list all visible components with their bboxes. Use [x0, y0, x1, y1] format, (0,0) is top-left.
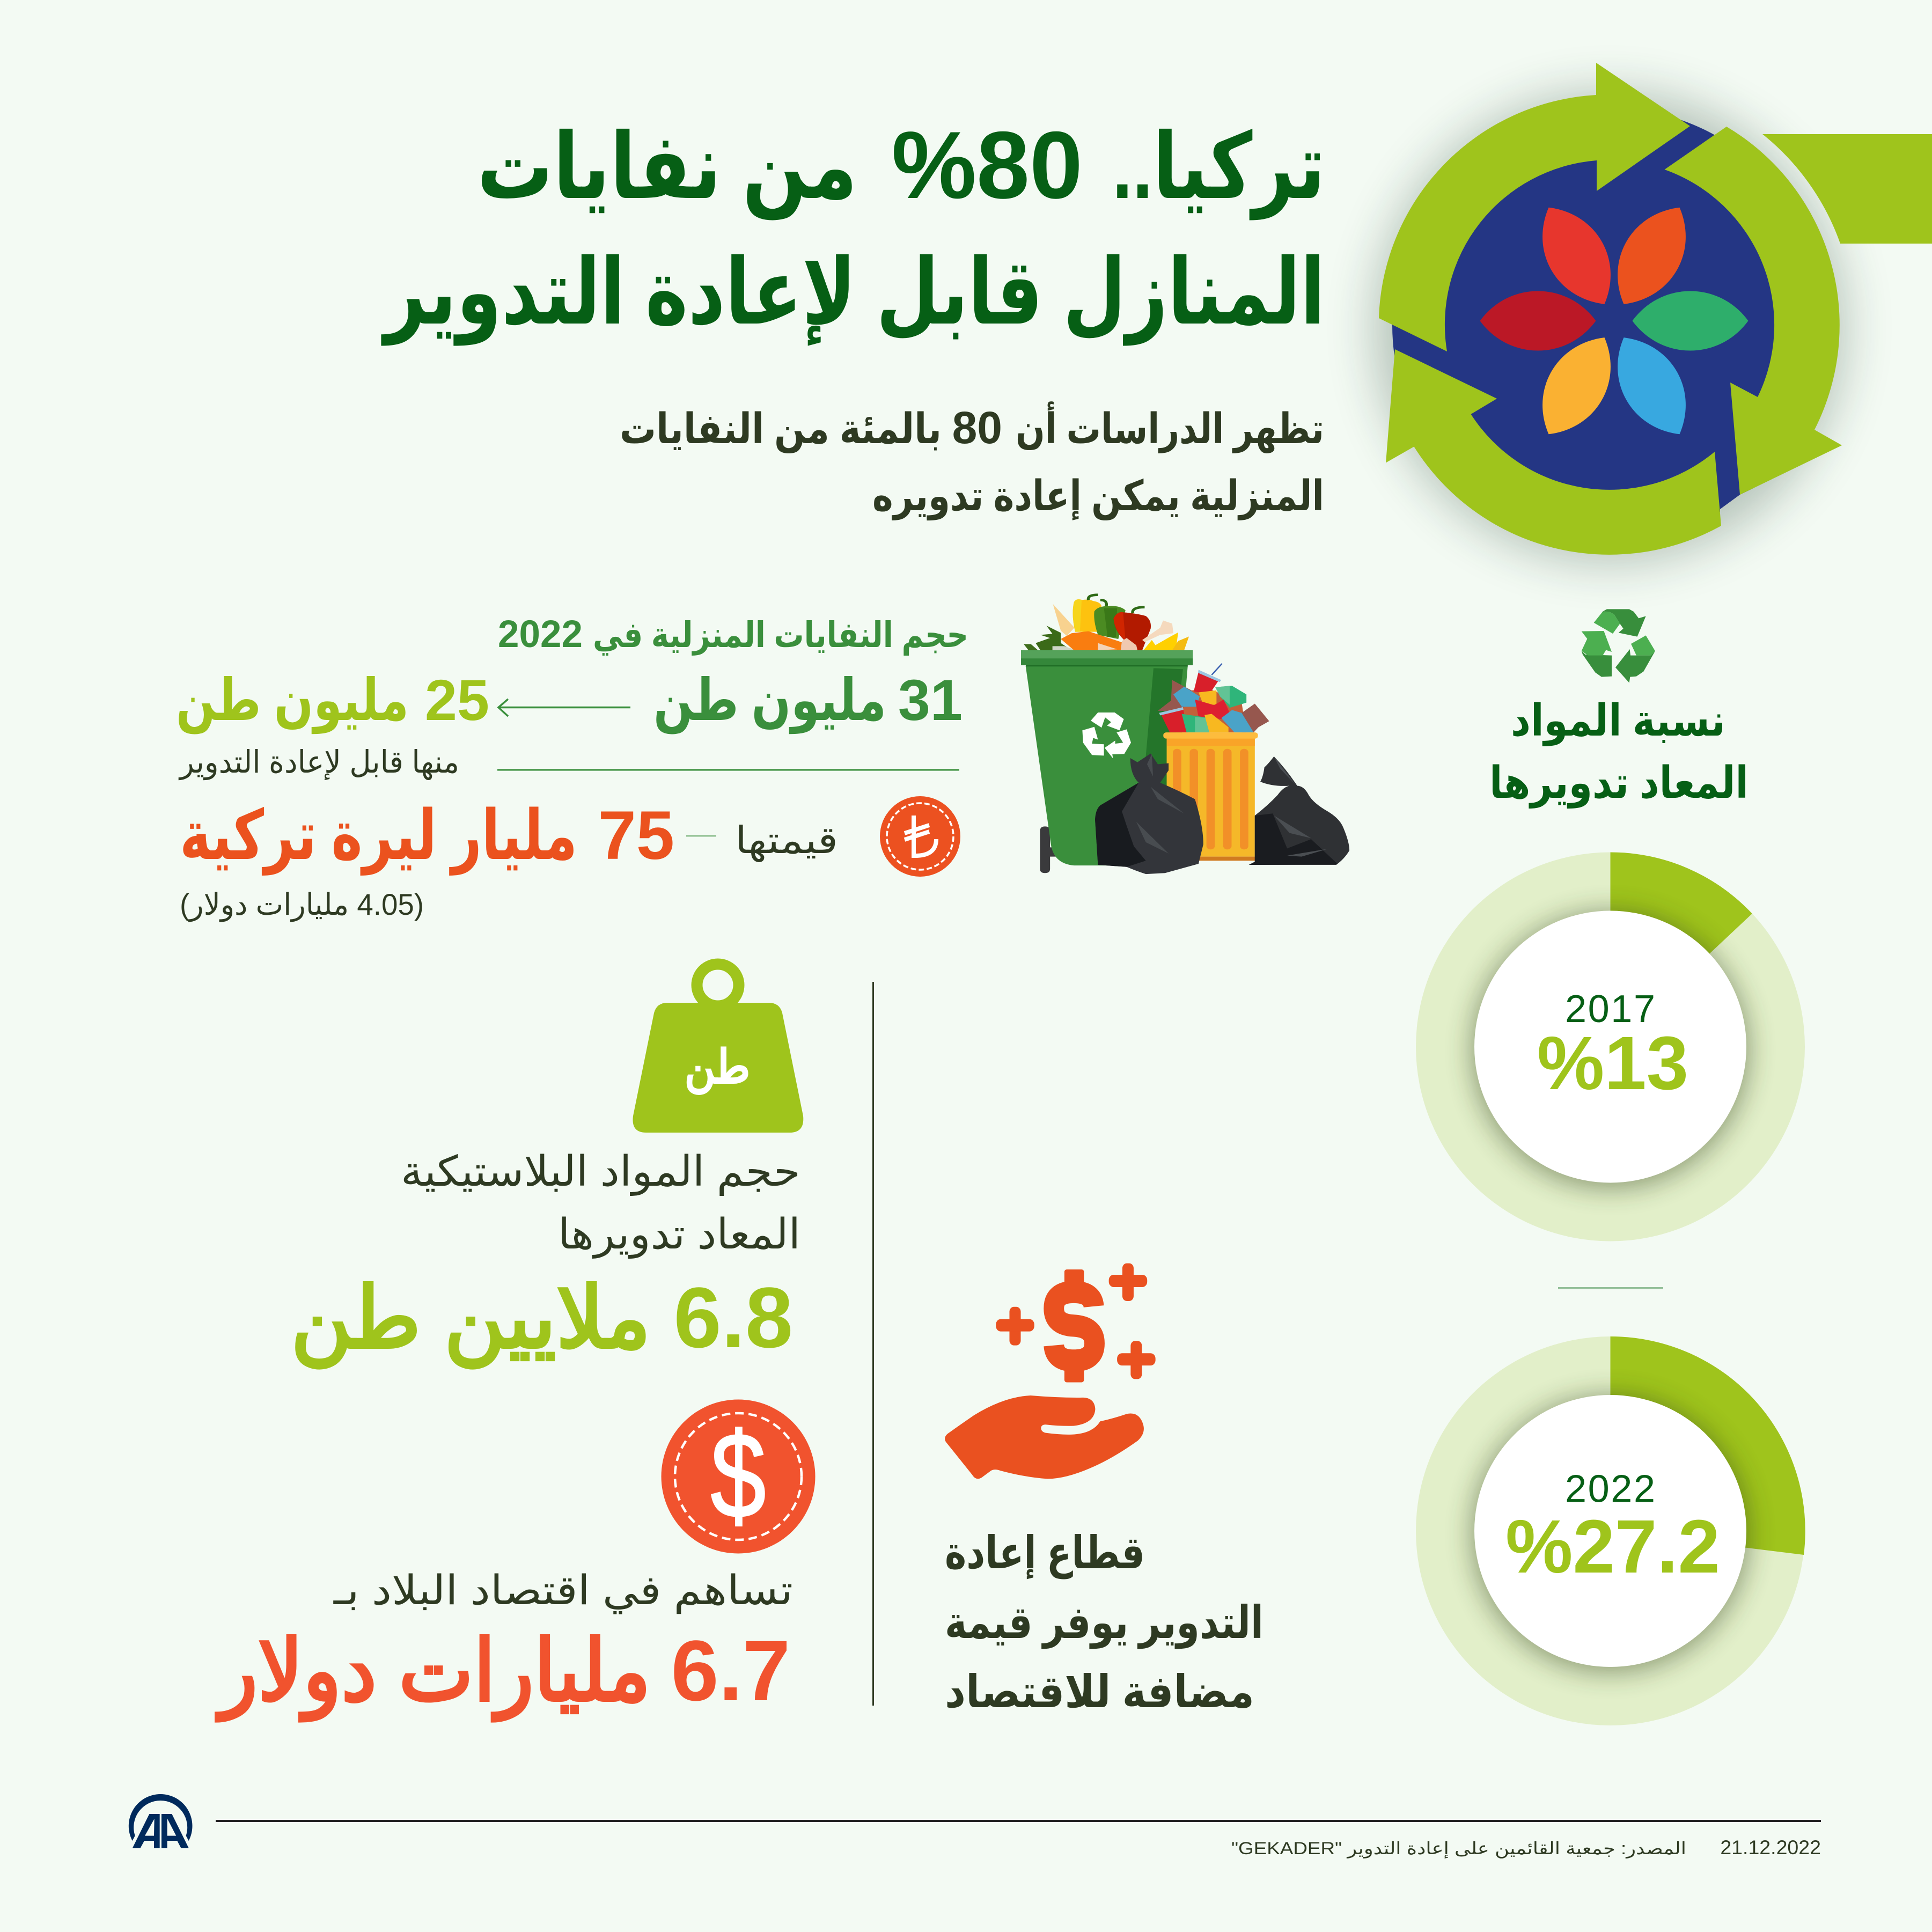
icon: dollar coin: [661, 1399, 816, 1554]
text: recycling sector adds value: التدوير يوفر قيمة: [945, 1597, 1263, 1649]
heading: household waste volume 2022: حجم النفايات المنزلية في: [593, 615, 968, 656]
title: %80: [892, 112, 1083, 218]
label: its value: قيمتها: [735, 819, 838, 862]
text: contributes to economy: تساهم في اقتصاد البلاد بـ: [333, 1568, 793, 1614]
black bag left: [1095, 754, 1203, 874]
title: تركيا..: [1112, 116, 1325, 221]
black bag right: [1249, 756, 1349, 865]
stat: 6.8 million tons: ملايين طن: [291, 1271, 651, 1368]
stat: 31 million tons: مليون طن: [653, 667, 886, 734]
icon: hand with dollar: [945, 1263, 1156, 1479]
title: من نفايات: [477, 116, 857, 221]
stat: 25 million tons: مليون طن: [176, 667, 409, 734]
stat: 6.7 billion dollars: 6.7: [671, 1622, 790, 1718]
text: recycled plastics volume: المعاد تدويرها: [558, 1210, 800, 1259]
text: recycling sector adds value: مضافة للاقتصاد: [945, 1666, 1254, 1717]
subtitle: تظهر الدراسات أن: [1016, 401, 1324, 453]
source: المصدر: جمعية القائمين على إعادة التدوير "GEKADER": [1231, 1839, 1686, 1858]
value 27.2%: %27.2: [1505, 1504, 1720, 1589]
yellow can: [1163, 732, 1258, 861]
icon: trash bins and bags: [1021, 595, 1349, 874]
icon: lira coin: [880, 796, 960, 877]
arrow: 31 to 25 million: [498, 699, 630, 716]
text: recycled plastics volume: حجم المواد البلاستيكية: [401, 1148, 800, 1196]
subtitle: بالمئة من النفايات: [620, 405, 942, 453]
green banner behind logo: [1762, 134, 1932, 244]
stat: 75 billion lira: مليار ليرة تركية: [180, 797, 577, 876]
heading: recycled material rate: نسبة المواد: [1511, 696, 1725, 746]
stat: 31 million tons: 31: [898, 667, 963, 732]
flower petals: [1480, 193, 1748, 449]
navy disc: [1392, 120, 1775, 512]
text: recycled plastics volume: [401, 1148, 800, 1259]
logo: AA: [129, 1794, 192, 1848]
stat: 6.7 billion dollars: مليارات دولار: [216, 1624, 651, 1721]
stat: 75 billion lira: 75: [598, 797, 674, 874]
heading: recycled material rate: [1489, 696, 1749, 809]
green bin: [1021, 650, 1193, 873]
subtitle: المنزلية يمكن إعادة تدويره: [872, 472, 1324, 521]
stat: 25 million tons: 25: [425, 667, 489, 732]
text: recycling sector adds value: [945, 1527, 1263, 1717]
stat: 6.8 million tons: 6.8: [674, 1269, 793, 1365]
donut chart: 2017: [1416, 852, 1805, 1242]
icon: weight: [633, 964, 803, 1133]
icon: recycling logo with flower: [1373, 63, 1932, 563]
label: recyclable portion: منها قابل لإعادة التدوير: [178, 745, 459, 781]
recycling symbol on bin: [1082, 712, 1131, 759]
icon: recycling symbol: [1582, 609, 1655, 683]
heading: recycled material rate: المعاد تدويرها: [1489, 759, 1749, 809]
date: 21.12.2022: [1720, 1836, 1821, 1858]
recycling arrow: bottom: [1386, 349, 1721, 555]
food waste: [1024, 595, 1189, 650]
recycling arrow: top left: [1379, 63, 1690, 351]
heading: household waste volume 2022: [498, 613, 968, 656]
subtitle: [620, 401, 1324, 521]
stat: 6.8 million tons: [291, 1269, 793, 1368]
text: recycling sector adds value: قطاع إعادة: [945, 1527, 1145, 1580]
plastic pile: [1158, 664, 1269, 732]
recycling arrow: right: [1664, 127, 1842, 495]
year 2017: 2017: [1565, 988, 1655, 1031]
value 13%: %13: [1537, 1020, 1688, 1105]
heading: household waste volume 2022: 2022: [498, 613, 583, 656]
title: المنازل قابل لإعادة التدوير: [381, 241, 1325, 346]
icon: dollar coin: $: [710, 1408, 766, 1543]
label: 4.05 billion dollars: (4.05 مليارات دولار): [180, 887, 424, 922]
title: [381, 112, 1325, 346]
subtitle: 80: [952, 402, 1002, 453]
donut chart: 2022: [1416, 1336, 1805, 1725]
label: ton: طن: [685, 1041, 750, 1094]
year 2022: 2022: [1565, 1468, 1655, 1511]
